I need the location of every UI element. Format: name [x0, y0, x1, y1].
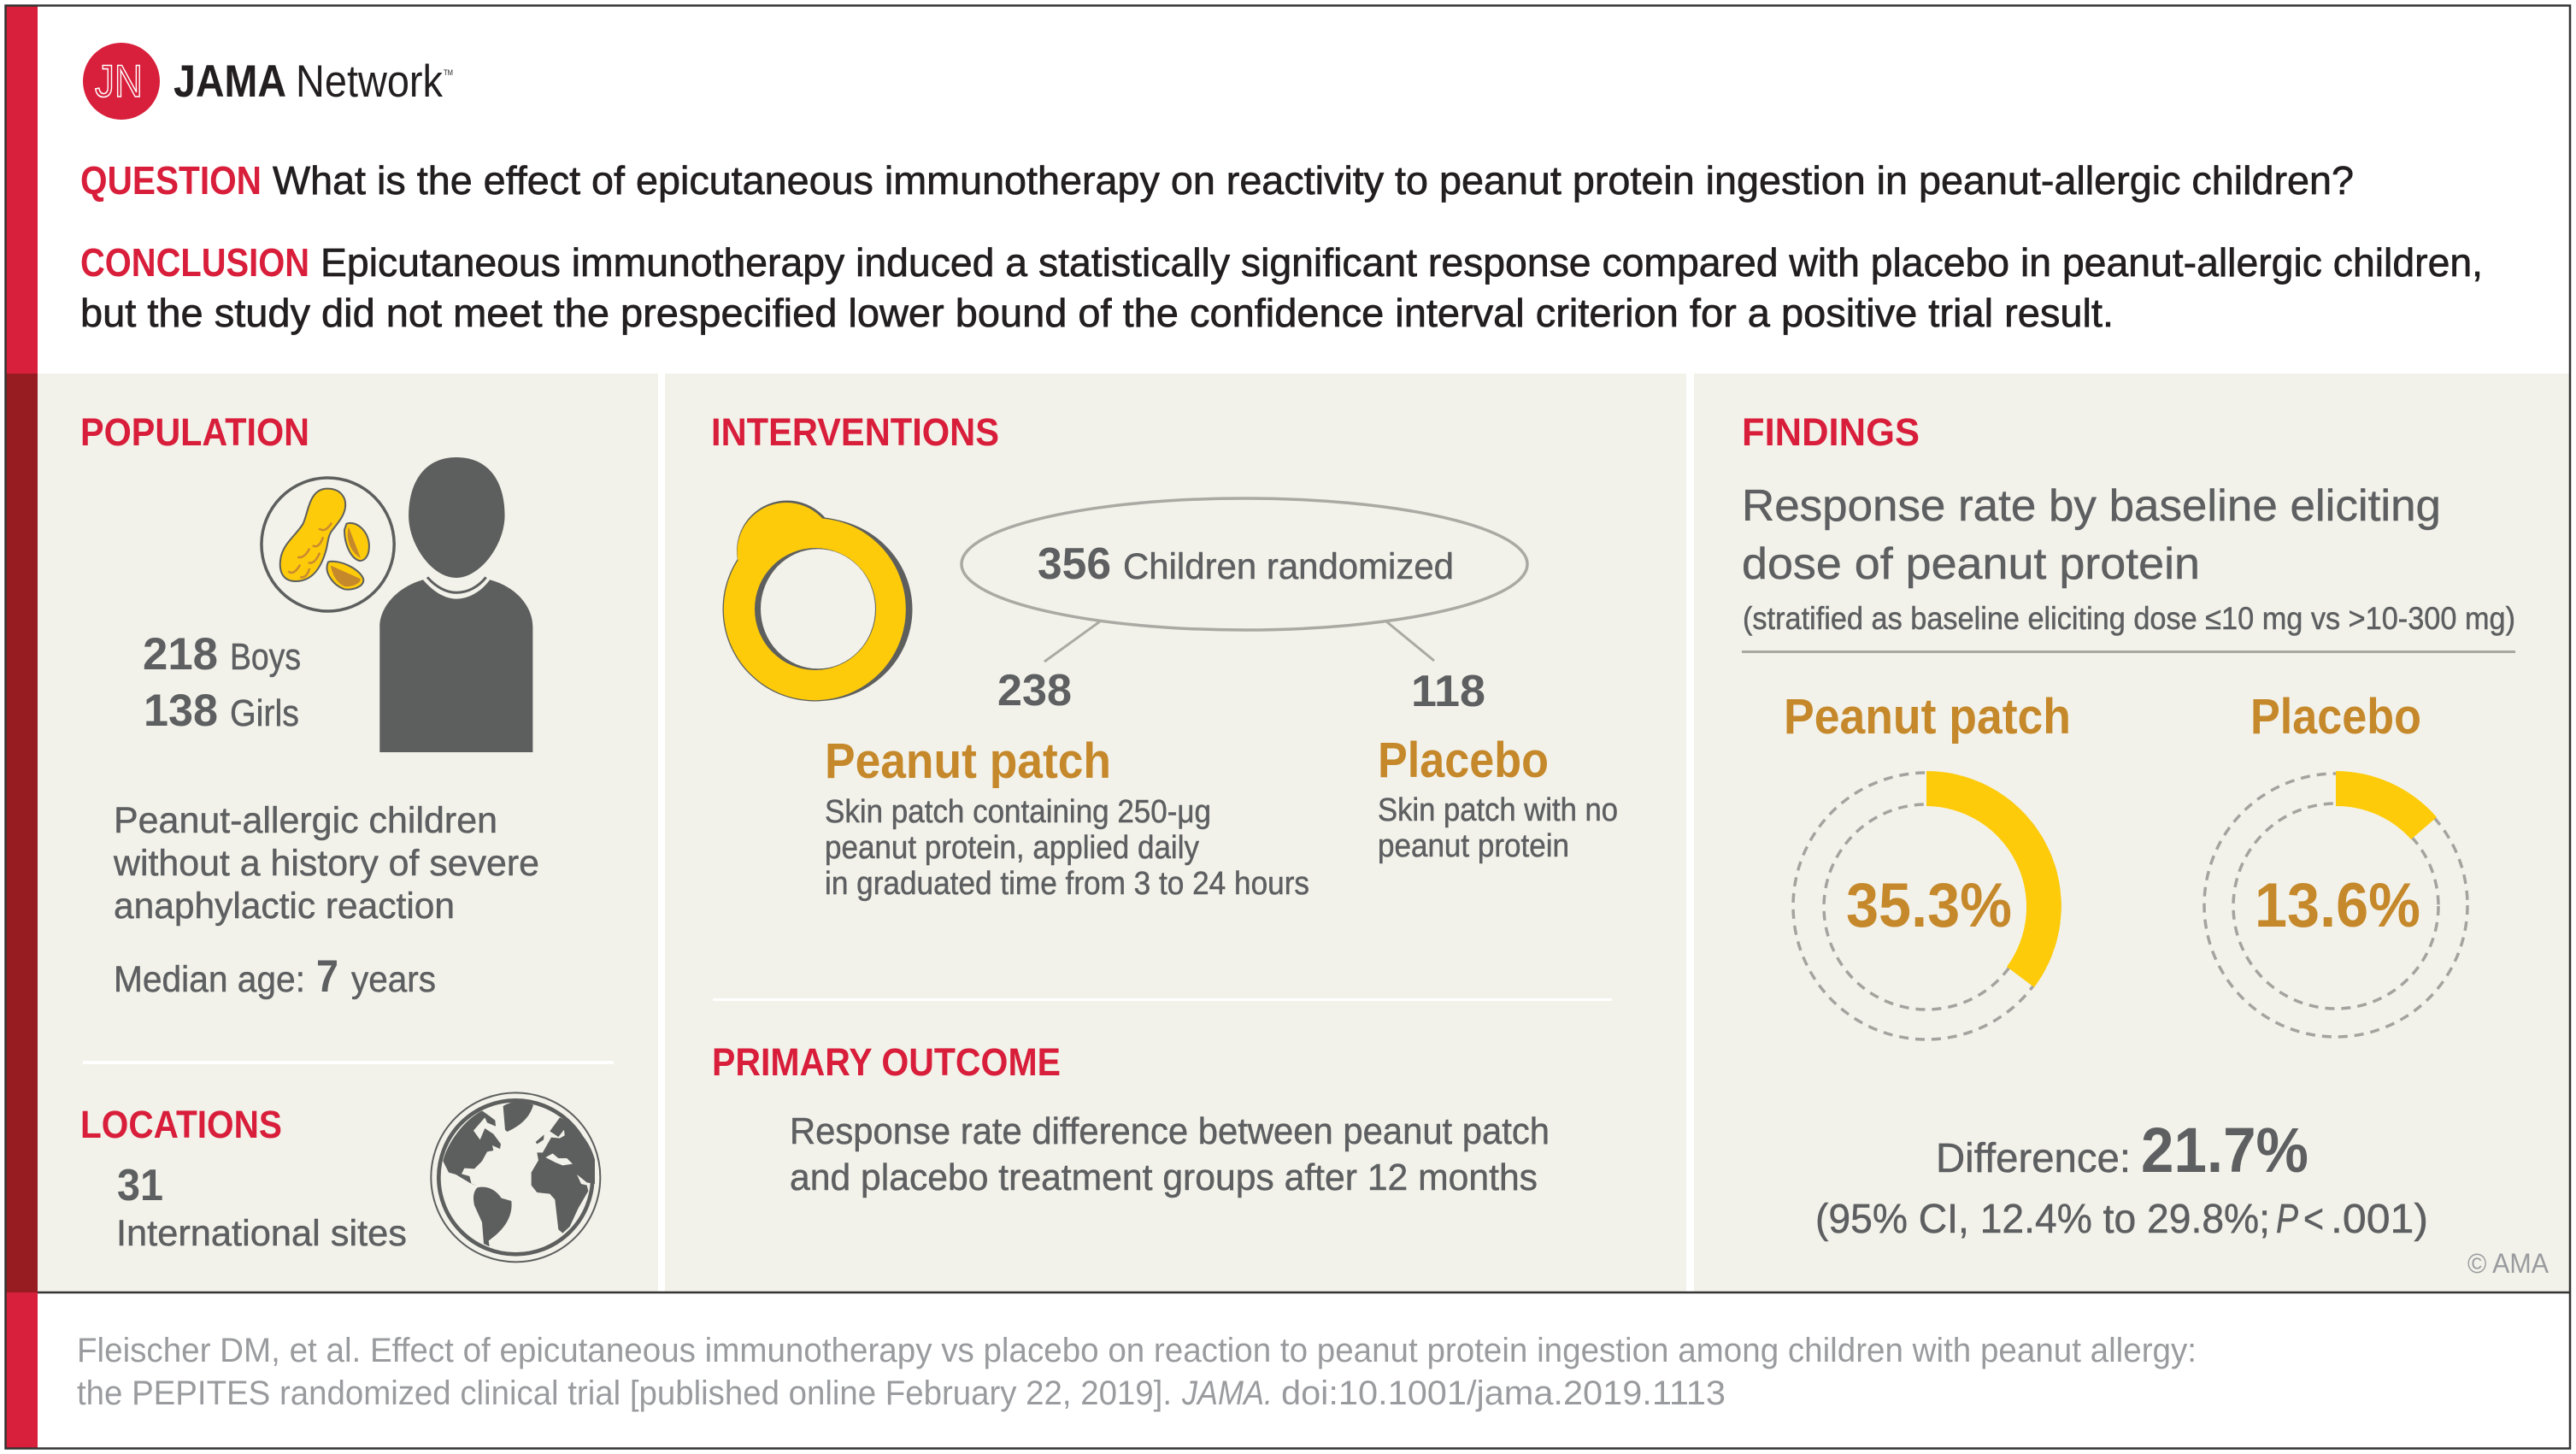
- difference result: Difference:: [1936, 1136, 2131, 1181]
- donut chart: peanut patch 35.3%: Peanut patch: [1784, 689, 2071, 745]
- donut chart: peanut patch 35.3%: [1784, 689, 2071, 1039]
- stat: boys: Boys: [230, 636, 301, 678]
- panel: population and locations background: [38, 374, 658, 1292]
- population description: anaphylactic reaction: [114, 886, 455, 927]
- stat: sites: 31: [117, 1161, 163, 1210]
- randomization ellipse: Children randomized: [1123, 546, 1454, 587]
- arm: peanut patch: [825, 666, 1309, 902]
- difference result: [1936, 1115, 2308, 1186]
- citation: the PEPITES randomized clinical trial [published online February 22, 2019].: [77, 1375, 1172, 1412]
- question: QUESTION: [80, 158, 262, 203]
- panel: interventions background: [665, 374, 1686, 1292]
- primary outcome text: Response rate difference between peanut patch: [790, 1110, 1550, 1152]
- heading: findings: FINDINGS: [1742, 410, 1920, 454]
- logo: JAMA Network: JAMA: [173, 56, 286, 107]
- primary outcome text: [790, 1110, 1550, 1198]
- arm: placebo: Skin patch with no: [1378, 792, 1618, 828]
- arm: peanut patch: in graduated time from 3 to 24 hours: [825, 866, 1309, 902]
- confidence interval: (95% CI, 12.4% to 29.8%;: [1815, 1197, 2270, 1242]
- difference result: 21.7%: [2141, 1115, 2308, 1186]
- heading: primary outcome: PRIMARY OUTCOME: [712, 1040, 1061, 1084]
- findings subtitle: (stratified as baseline eliciting dose ≤10 mg vs >10-300 mg): [1743, 601, 2515, 636]
- logo: JAMA Network: Network: [296, 56, 443, 107]
- arm: placebo: peanut protein: [1378, 828, 1569, 864]
- left colour bar: [6, 6, 38, 1448]
- arm: peanut patch: Skin patch containing 250-μg: [825, 794, 1211, 830]
- arm: placebo: Placebo: [1378, 733, 1549, 788]
- confidence interval: <: [2303, 1197, 2324, 1242]
- conclusion: but the study did not meet the prespecified lower bound of the confidence interval criterion for a positive trial result.: [80, 291, 2114, 335]
- primary outcome text: and placebo treatment groups after 12 months: [790, 1157, 1538, 1198]
- connector lines: [1044, 621, 1434, 662]
- arm: placebo: [1378, 667, 1618, 864]
- panel: findings background: [1694, 374, 2570, 1292]
- findings subtitle: dose of peanut protein: [1742, 539, 2200, 589]
- citation: doi:10.1001/jama.2019.1113: [1281, 1375, 1726, 1412]
- question: What is the effect of epicutaneous immunotherapy on reactivity to peanut protein ingestion in peanut-allergic children?: [273, 158, 2354, 203]
- heading: population: POPULATION: [80, 410, 309, 454]
- heading: locations: LOCATIONS: [80, 1103, 282, 1146]
- conclusion: CONCLUSION: [80, 240, 309, 285]
- population description: without a history of severe: [113, 843, 539, 884]
- stat: boys: 218: [143, 629, 218, 680]
- logo: JAMA Network: [83, 43, 453, 120]
- donut chart: placebo 13.6%: Placebo: [2250, 689, 2421, 745]
- stat: girls: [144, 686, 299, 736]
- heading: interventions: INTERVENTIONS: [711, 410, 999, 454]
- conclusion: Epicutaneous immunotherapy induced a statistically significant response compared with placebo in peanut-allergic children,: [321, 240, 2483, 285]
- population description: Peanut-allergic children: [114, 800, 497, 841]
- icon: globe: [431, 1092, 600, 1262]
- randomization ellipse: 356: [1038, 539, 1111, 589]
- donut chart: placebo 13.6%: [2204, 689, 2467, 1037]
- stat: boys: [143, 629, 301, 680]
- citation: Fleischer DM, et al. Effect of epicutaneous immunotherapy vs placebo on reaction to peanut protein ingestion among children with peanut allergy:: [77, 1332, 2197, 1369]
- stat: sites: [116, 1161, 407, 1254]
- citation: JAMA.: [1181, 1375, 1273, 1412]
- median age: Median age:: [114, 959, 305, 1000]
- icon: peanut in circle: [262, 478, 394, 611]
- arm: peanut patch: peanut protein, applied daily: [825, 830, 1199, 866]
- copyright: © AMA: [2467, 1248, 2550, 1279]
- stat: girls: Girls: [230, 692, 299, 734]
- findings subtitle: Response rate by baseline eliciting: [1742, 481, 2441, 531]
- arm: placebo: 118: [1411, 667, 1485, 716]
- donut chart: placebo 13.6%: 13.6%: [2255, 871, 2420, 940]
- logo: JAMA Network: TM: [444, 68, 453, 77]
- stat: girls: 138: [144, 686, 218, 736]
- median age: 7: [316, 951, 338, 1002]
- findings subtitle: [1742, 481, 2515, 653]
- icon: child silhouette: [379, 457, 532, 752]
- median age: years: [351, 959, 436, 1000]
- arm: peanut patch: Peanut patch: [825, 733, 1111, 789]
- conclusion: [80, 240, 2483, 335]
- confidence interval: .001): [2331, 1197, 2428, 1242]
- median age: [114, 951, 436, 1002]
- logo: JAMA Network: JN: [95, 56, 143, 107]
- arm: peanut patch: 238: [997, 666, 1072, 715]
- randomization ellipse: [962, 498, 1527, 630]
- stat: sites: International sites: [116, 1213, 407, 1254]
- population description: [113, 800, 539, 927]
- confidence interval: P: [2276, 1197, 2298, 1242]
- citation: [77, 1332, 2197, 1412]
- donut chart: peanut patch 35.3%: 35.3%: [1846, 871, 2012, 940]
- icon: skin patch: [723, 501, 913, 701]
